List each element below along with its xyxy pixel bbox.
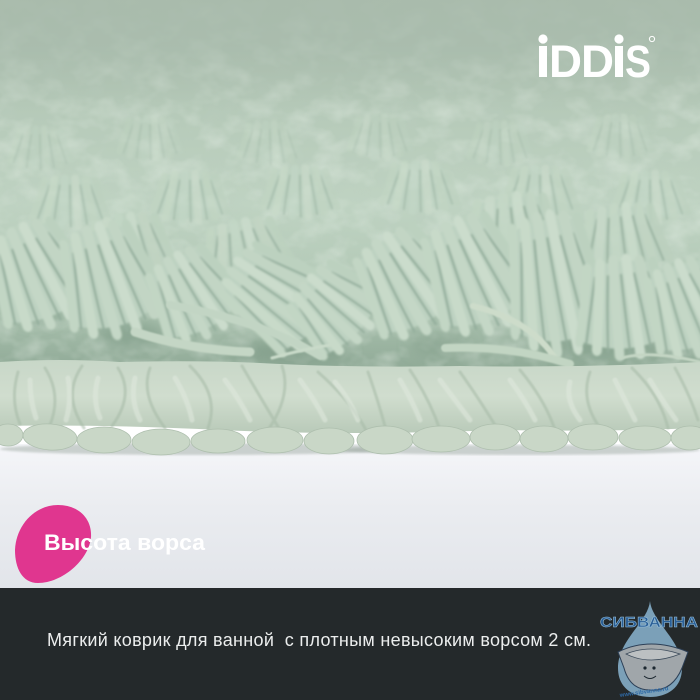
rug pile background xyxy=(0,0,700,372)
heading: Высота ворса xyxy=(44,530,206,555)
logo: iDDiS: S xyxy=(625,36,651,87)
bath mat corded edge xyxy=(0,360,700,433)
loose yarn strands xyxy=(135,305,700,364)
logo: iDDiS xyxy=(538,34,655,87)
bead stitch edge xyxy=(0,422,700,455)
logo: iDDiS: D xyxy=(549,36,582,87)
pink blob accent xyxy=(15,505,91,583)
logo: iDDiS: D xyxy=(581,36,614,87)
watermark logo: СИБВАННА xyxy=(600,601,698,699)
floor xyxy=(0,444,700,588)
footer band xyxy=(0,588,700,700)
watermark logo: СИБВАННА: СИБВАННА xyxy=(600,614,698,631)
description text: Мягкий коврик для ванной с плотным невысоким ворсом 2 см. xyxy=(47,630,591,650)
shaggy pile tufts xyxy=(0,116,700,367)
watermark logo: СИБВАННА: www.sibvanna.ru xyxy=(618,686,669,699)
